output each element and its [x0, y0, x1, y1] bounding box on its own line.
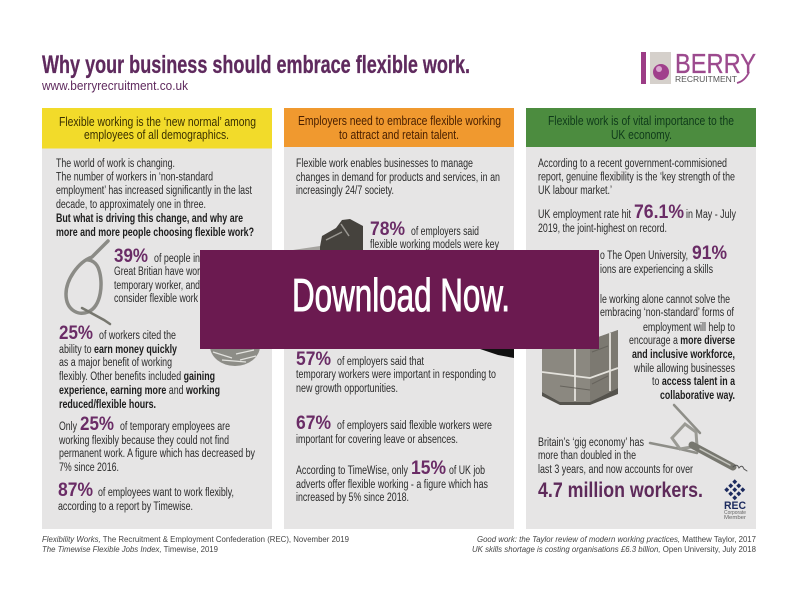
text: non-standard employment: collaborative way.	[660, 390, 735, 402]
stat: 25% earn money: ability to earn money quickly	[59, 344, 177, 356]
title: Why your business should embrace flexible work.	[42, 51, 470, 79]
stat: 39%: 39%	[114, 245, 148, 267]
stat: 76.1%	[538, 201, 736, 235]
stat: 78%: 78%	[370, 218, 405, 240]
stat: gig economy: last 3 years, and now accounts for over	[538, 464, 693, 476]
intro text: employment’ has increased significantly in the last	[56, 185, 253, 197]
stat: 87%: of employees want to work flexibly,	[98, 487, 234, 499]
panel: UK economy	[526, 108, 756, 529]
stat: 57%: of employers said that	[337, 356, 425, 368]
panel: attract and retain	[284, 108, 514, 529]
intro text: more and more people choosing flexible work?	[56, 227, 254, 239]
stat: 15%: increased by 5% since 2018.	[296, 492, 409, 504]
stat: 25% temporary: of temporary employees are	[120, 421, 230, 433]
stat: 15%: According to TimeWise, only	[296, 465, 408, 477]
icon: corkscrew	[650, 405, 747, 471]
stat: 39%: Great Britian have wor	[114, 266, 200, 278]
stat: 91%: ions are experiencing a skills	[600, 264, 713, 276]
logo: REC Corporate Member: Corporate	[724, 510, 746, 516]
panel heading: green: Flexible work is of vital importance to the	[548, 114, 734, 128]
stat: 57%: temporary workers were important in responding to	[296, 369, 496, 381]
stat: 78%: of employers said	[411, 226, 479, 238]
footnotes right: UK skills shortage is costing organisations £6.3 billion, Open University, July 2018	[472, 545, 756, 554]
stat: 87%: 87%	[58, 479, 93, 501]
stat: 15%: of UK job	[449, 465, 485, 477]
panel heading: green	[526, 108, 756, 147]
text: non-standard employment	[600, 294, 735, 402]
stat: 67%: important for covering leave or absences.	[296, 434, 458, 446]
stat: 25% earn money: of workers cited the	[99, 330, 176, 342]
footnotes left	[42, 535, 349, 554]
stat: 87%: according to a report by Timewise.	[58, 501, 193, 513]
icon: coiled hose	[66, 241, 110, 324]
text: non-standard employment: while allowing businesses	[633, 363, 735, 375]
logo: REC Corporate Member: REC	[724, 500, 746, 512]
intro text: But what is driving this change, and why are	[56, 213, 243, 225]
stat: 25% earn money: as a major benefit of working	[59, 357, 172, 369]
stat: 25% earn money: reduced/flexible hours.	[59, 399, 156, 411]
stat: 67%: of employers said flexible workers were	[337, 420, 492, 432]
stat: 39%: consider flexible work	[114, 293, 198, 305]
stat: 91%: o The Open University,	[600, 250, 688, 262]
banner: Download Now	[200, 250, 599, 349]
panel heading: orange: to attract and retain talent.	[339, 128, 459, 142]
banner: Download Now: Download Now.	[292, 269, 510, 321]
stat: 25% earn money: 25%	[59, 322, 93, 344]
panel heading: yellow: Flexible working is the ‘new normal’ among	[59, 115, 256, 129]
stat: 25% earn money: flexibly. Other benefits included gaining	[59, 371, 215, 383]
stat: gig economy: more than doubled in the	[538, 450, 636, 462]
stat: 67%	[296, 412, 492, 446]
panel heading: yellow: employees of all demographics.	[84, 128, 229, 142]
logo: REC Corporate Member	[724, 479, 746, 521]
stat: 76.1%: 2019, the joint-highest on record.	[538, 223, 667, 235]
stat: 15%: adverts offer flexible working - a figure which has	[296, 479, 488, 491]
stat: 25% earn money: experience, earning more and working	[59, 385, 220, 397]
stat: 76.1%: UK employment rate hit	[538, 209, 632, 221]
boot sole fragment	[480, 349, 514, 358]
text: non-standard employment: le working alone cannot solve the	[600, 294, 730, 306]
intro text: UK labour market.’	[538, 185, 612, 197]
intro text: The number of workers in ‘non-standard	[56, 172, 213, 184]
stat: 78%	[370, 218, 499, 251]
panel: new normal	[42, 108, 272, 529]
stat: 67%: 67%	[296, 412, 331, 434]
intro text: increasingly 24/7 society.	[296, 185, 394, 197]
stat: 25% temporary	[58, 413, 255, 474]
stat: 25% temporary: Only	[59, 421, 77, 433]
logo: Berry Recruitment	[641, 48, 756, 84]
icon: pallet of boxes	[542, 330, 618, 405]
stat: 91%: 91%	[692, 242, 727, 264]
stat: 76.1%: in May - July	[686, 209, 736, 221]
stat: 39%: of people in	[154, 253, 200, 265]
stat: 25% temporary: 25%	[80, 413, 114, 435]
stat: 57%: new growth opportunities.	[296, 383, 398, 395]
stat: 25% temporary: permanent work. A figure which has decreased by	[59, 448, 255, 460]
stat: 78%: flexible working models were key	[370, 239, 499, 251]
intro text	[56, 158, 254, 239]
intro text: changes in demand for products and services, in an	[296, 172, 500, 184]
panel heading: orange: Employers need to embrace flexible working	[298, 114, 501, 128]
logo: Berry Recruitment: BERRY	[675, 48, 756, 79]
stat: 91%	[600, 242, 727, 276]
stat: 25% temporary: 7% since 2016.	[59, 462, 119, 474]
stat: 15%: 15%	[411, 457, 446, 479]
intro text: decade, to approximately one in three.	[56, 199, 206, 211]
intro text: According to a recent government-commisioned	[538, 158, 727, 170]
text: non-standard employment: encourage a more diverse	[629, 335, 735, 347]
stat: gig economy: Britain’s ‘gig economy’ has	[538, 437, 644, 449]
icon: work boot	[293, 219, 363, 252]
text: non-standard employment: and inclusive workforce,	[632, 349, 735, 361]
stat: 87%	[58, 479, 234, 513]
panel heading: green: UK economy.	[611, 128, 672, 142]
logo: Berry Recruitment: RECRUITMENT	[675, 75, 737, 84]
stat: 76.1%: 76.1%	[634, 201, 684, 223]
stat: 25% earn money	[59, 322, 220, 411]
intro text: Flexible work enables businesses to manage	[296, 158, 473, 170]
text: non-standard employment: embracing ‘non-standard’ forms of	[600, 307, 735, 319]
stat: 39%	[114, 245, 200, 305]
stat: 39%: temporary worker, and	[114, 280, 200, 292]
intro text: The world of work is changing.	[56, 158, 175, 170]
stat: 15%	[296, 457, 488, 504]
website url: www.berryrecruitment.co.uk	[41, 78, 188, 93]
stat: 57%	[296, 348, 496, 395]
footnotes left: Flexibility Works, The Recruitment & Employment Confederation (REC), November 2019	[42, 535, 349, 544]
intro text: report, genuine flexibility is the ‘key strength of the	[538, 172, 735, 184]
footnotes right: Good work: the Taylor review of modern working practices, Matthew Taylor, 2017	[477, 535, 756, 544]
footnotes left: The Timewise Flexible Jobs Index, Timewise, 2019	[42, 545, 218, 554]
text: non-standard employment: employment will help to	[643, 322, 735, 334]
stat: gig economy	[538, 437, 703, 502]
text: non-standard employment: to access talent in a	[652, 376, 735, 388]
stat: gig economy: 4.7 million workers.	[538, 479, 703, 502]
icon: wire ball	[210, 326, 260, 366]
intro text	[296, 158, 500, 197]
panel heading: yellow	[42, 108, 272, 148]
intro text	[538, 158, 735, 197]
logo: REC Corporate Member: Member	[724, 515, 746, 521]
stat: 57%: 57%	[296, 348, 331, 370]
stat: 25% temporary: working flexibly because they could not find	[58, 435, 229, 447]
panel heading: orange	[284, 108, 514, 147]
footnotes right	[472, 535, 756, 554]
